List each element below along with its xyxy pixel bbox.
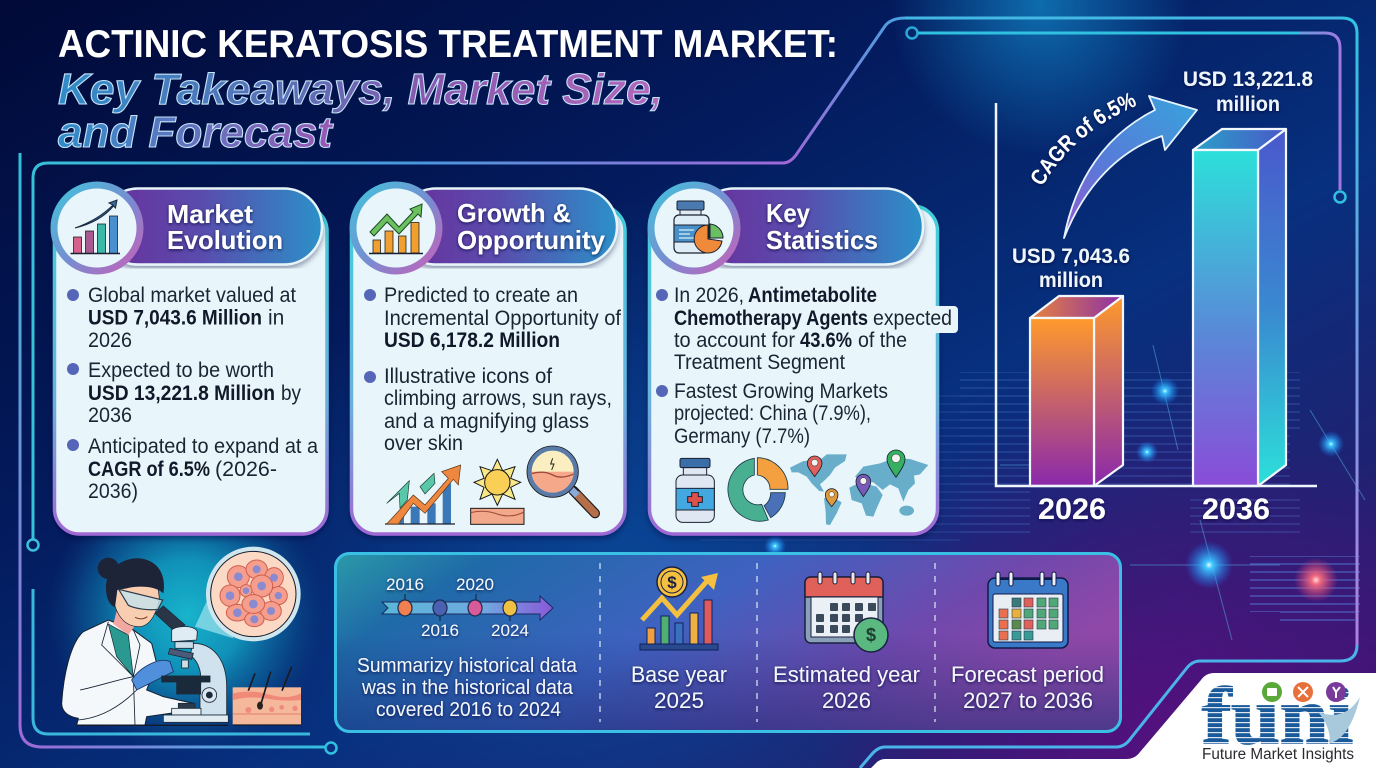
bullet list: key statistics [656,284,952,448]
bullet list: market evolution: 2036 [88,404,132,427]
icon: medicine bottle [676,458,714,522]
bullet list: market evolution: (2026- [215,458,277,481]
magnified skin cells [195,547,301,641]
bullet list: market evolution: Anticipated to expand at a [88,435,318,458]
bullet list: market evolution: CAGR of 6.5% [88,458,210,481]
bullet list: growth and opportunity: Illustrative icons of [384,365,552,388]
skin cross-section [233,667,301,725]
bullet list: growth and opportunity: Predicted to create an [384,284,578,307]
header pill: growth and opportunity: Growth & [457,198,571,228]
header pill: growth and opportunity [398,188,617,264]
microscope [155,606,228,722]
header pill: market evolution: Market [167,199,253,229]
arrow: CAGR growth: CAGR of 6.5% [1030,92,1137,186]
icon: rising bar chart [54,185,140,271]
bullet list: key statistics: expected [873,307,952,330]
text: historical data: was in the historical data [361,676,574,699]
header pill: key statistics [696,188,923,264]
icon: growth chart [353,185,439,271]
bullet list: key statistics: In 2026, [674,284,744,307]
value label: 2026: million [1039,269,1103,292]
bullet list: growth and opportunity: and a magnifying glass [384,410,589,433]
value label: 2026: USD 7,043.6 [1012,245,1130,268]
text: forecast period: Forecast period [951,662,1104,687]
icon: estimated year calendar: $ [866,625,876,645]
bullet list: market evolution: Expected to be worth [88,359,274,382]
text: base year: Base year [631,662,727,687]
bullet list: market evolution: USD 7,043.6 Million [88,306,262,330]
icon: magnifying glass over skin [527,446,595,513]
timeline arrow 2016 to 2024 [382,575,553,640]
value label: 2036: million [1216,93,1280,116]
value label: 2036 [1183,68,1313,116]
icon: forecast period calendar [988,572,1068,648]
title: ACTINIC KERATOSIS TREATMENT MARKET: [58,23,838,66]
text: forecast period [951,662,1104,713]
bullet list: market evolution: by [281,382,301,405]
bullet list: key statistics: Germany (7.7%) [674,425,810,448]
bullet list: market evolution: 2036) [88,480,138,503]
header pill: key statistics: Key [766,198,810,228]
bullet list: market evolution: Global market valued at [88,284,296,307]
axis label: 2026: 2026 [1038,493,1106,526]
timeline arrow 2016 to 2024: 2016 [386,575,424,594]
bullet list: key statistics: 43.6% [800,329,852,352]
header pill: market evolution [100,188,322,264]
bullet list: key statistics: Chemotherapy Agents [674,307,868,330]
logo: Future Market Insights: funi [1202,673,1353,761]
timeline arrow 2016 to 2024: 2020 [456,575,494,594]
bullet list: market evolution: in [268,306,284,330]
arrow: CAGR growth [1030,92,1198,239]
panel: market evolution [54,185,327,534]
chart axes [996,103,1317,486]
text: base year: 2025 [654,688,704,713]
bullet list: market evolution: 2026 [88,329,132,352]
bullet list: growth and opportunity [364,284,621,455]
panel: growth and opportunity [352,185,625,534]
text: estimated year [773,662,920,713]
text: estimated year: Estimated year [773,662,920,687]
title: and Forecast [58,108,334,157]
logo: Future Market Insights [871,673,1376,768]
panel: timeline of study periods [336,554,1120,732]
text: historical data [357,654,578,721]
icon: climbing arrows [385,465,461,524]
bar chart: market size 2026 vs 2036 [994,68,1317,526]
header pill: key statistics: Statistics [766,225,878,255]
title [58,23,838,157]
bullet list: market evolution [67,284,318,503]
icon: sun over skin [471,459,524,524]
bullet list: key statistics: Antimetabolite [748,284,877,307]
axis label: 2036: 2036 [1202,493,1270,526]
text: base year [631,662,727,713]
callout highlight [868,306,958,333]
text: historical data: covered 2016 to 2024 [376,698,561,721]
bullet list: key statistics: Treatment Segment [674,351,845,374]
value label: 2036: USD 13,221.8 [1183,68,1313,91]
header pill: growth and opportunity: Opportunity [457,225,606,255]
bullet list: key statistics: to account for [674,329,795,352]
bar: 2036 [1193,129,1286,486]
bullet list: key statistics: Fastest Growing Markets [674,380,888,403]
icon: estimated year calendar [805,572,888,652]
bullet list: growth and opportunity: USD 6,178.2 Million [384,329,560,352]
logo: Future Market Insights: Future Market Insights [1202,746,1354,763]
bullet list: key statistics: of the [858,329,907,352]
icon: base year chart: $ [667,573,677,592]
value label: 2026 [1012,245,1130,292]
icon: world map with pins [790,450,928,525]
bullet list: growth and opportunity: over skin [384,432,463,455]
panel: key statistics [650,185,958,534]
scientist [62,558,193,725]
illustration: scientist at microscope [62,547,301,725]
bullet list: growth and opportunity: Incremental Opportunity of [384,307,621,330]
text: estimated year: 2026 [822,688,871,713]
text: forecast period: 2027 to 2036 [963,688,1093,713]
timeline arrow 2016 to 2024: 2024 [491,621,529,640]
text: historical data: Summarizy historical data [357,654,578,677]
title: Key Takeaways, Market Size, [58,65,663,114]
icon: base year chart [640,567,718,650]
timeline arrow 2016 to 2024: 2016 [421,621,459,640]
bullet list: market evolution: USD 13,221.8 Million [88,382,275,405]
bullet list: key statistics: projected: China (7.9%), [674,402,871,425]
donut chart [728,458,788,521]
icon: bottle and pie chart [651,185,737,271]
header pill: market evolution: Evolution [167,225,283,255]
bullet list: growth and opportunity: climbing arrows, sun rays, [384,387,612,410]
bar: 2026 [1030,296,1123,486]
